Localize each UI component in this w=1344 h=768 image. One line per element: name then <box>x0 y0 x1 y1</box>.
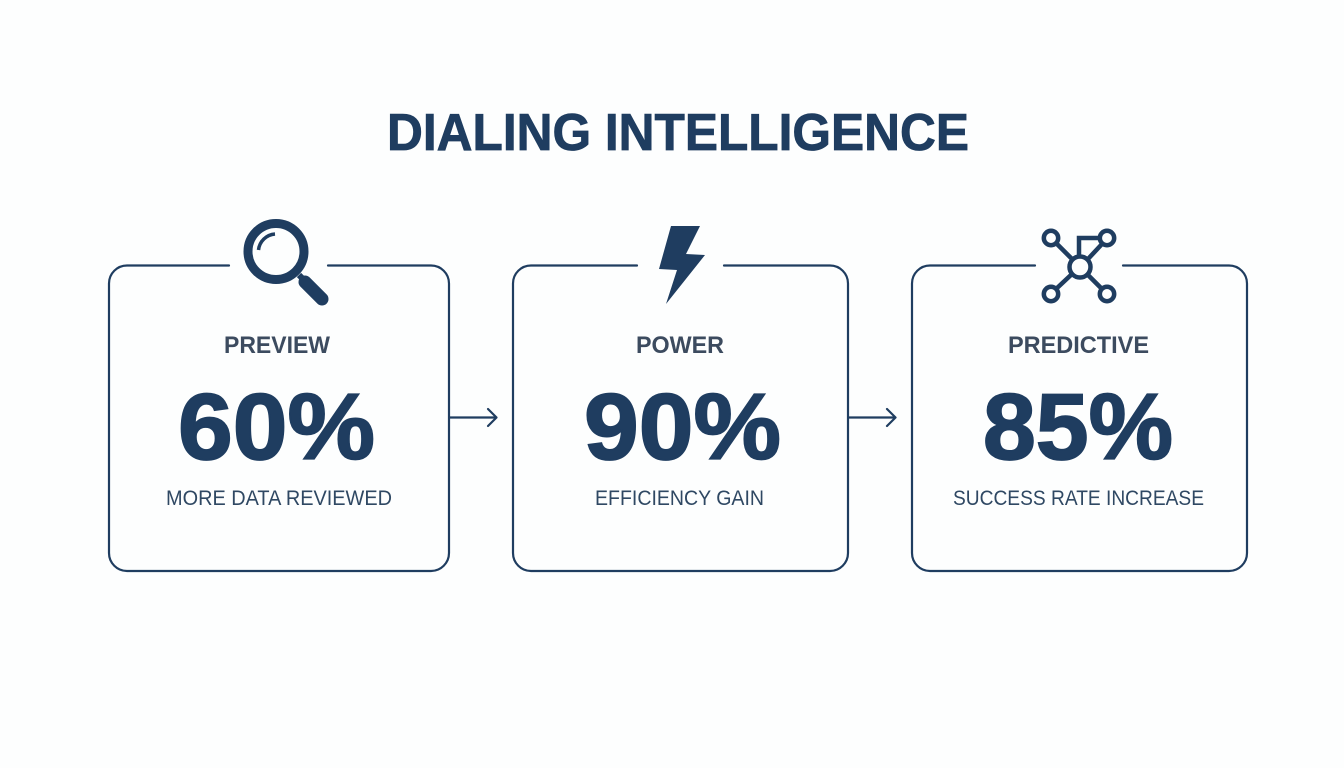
panel: power <box>513 226 848 571</box>
stat: 90%: 90% <box>584 374 781 479</box>
heading: power: POWER <box>636 332 724 359</box>
icon: lightning bolt <box>659 226 705 304</box>
panel: predictive <box>912 231 1247 571</box>
panel: preview <box>109 224 449 571</box>
icon: network nodes <box>1044 231 1114 301</box>
arrow: power to predictive <box>849 409 896 426</box>
label: success rate increase: SUCCESS RATE INCREASE <box>953 487 1204 510</box>
card outline: preview <box>109 266 449 571</box>
label: efficiency gain: EFFICIENCY GAIN <box>595 487 764 510</box>
heading: preview: PREVIEW <box>224 332 330 359</box>
icon: magnifying glass <box>248 224 322 299</box>
arrow: preview to power <box>450 409 496 426</box>
stat: 60%: 60% <box>178 374 375 479</box>
card outline: predictive <box>912 266 1247 571</box>
heading: predictive: PREDICTIVE <box>1008 332 1149 359</box>
stat: 85%: 85% <box>983 374 1173 479</box>
title: DIALING INTELLIGENCE <box>387 104 969 162</box>
card outline: power <box>513 266 848 571</box>
label: more data reviewed: MORE DATA REVIEWED <box>166 487 392 510</box>
